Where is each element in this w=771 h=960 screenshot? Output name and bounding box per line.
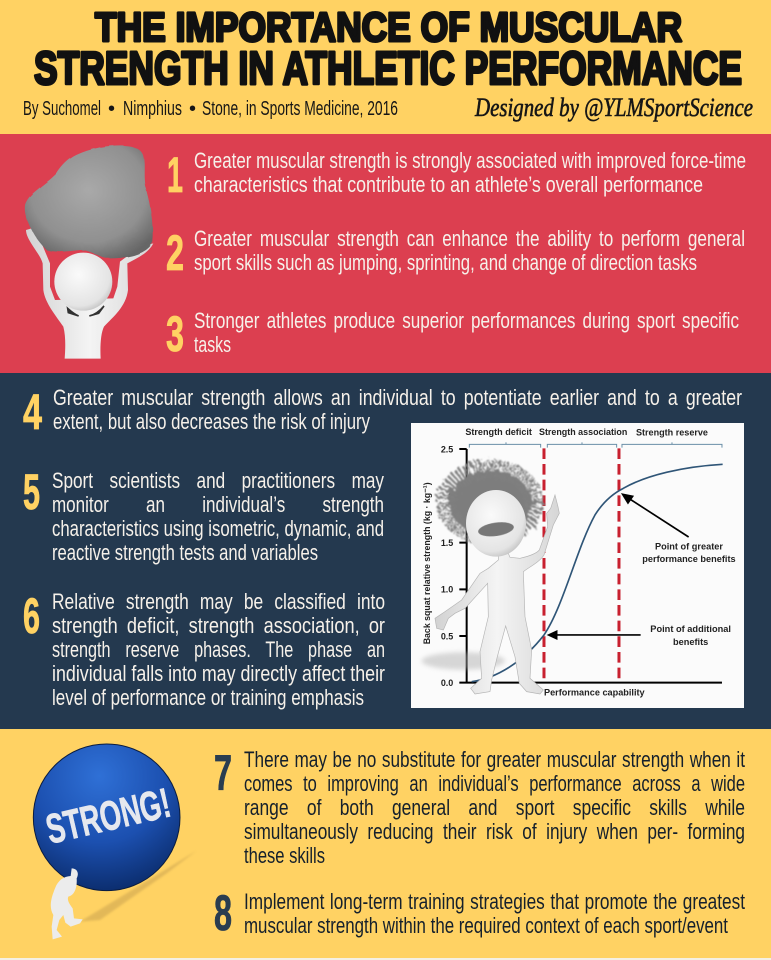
- axis ticks labels: 2: [448, 491, 453, 501]
- number 2: 2: [166, 225, 184, 281]
- text 6: level of performance or training emphasis: [52, 685, 364, 710]
- axis ticks labels: 2.5: [441, 445, 453, 455]
- panel: yellow section: [0, 729, 771, 960]
- text 6: [52, 589, 385, 710]
- number 7: 7: [214, 745, 232, 801]
- point 8: [214, 885, 745, 941]
- chart: strength phases curve: [411, 423, 744, 708]
- icon: figure lifting rock: [25, 145, 153, 359]
- panel: navy section: [0, 373, 771, 729]
- panel: header: [0, 0, 771, 134]
- phase labels: Strength deficit: [465, 427, 532, 437]
- arrow to upper point: [623, 494, 689, 537]
- text 4: [53, 385, 742, 434]
- text 1: [194, 148, 746, 197]
- axis ticks labels: [441, 445, 453, 688]
- number 6: 6: [23, 588, 40, 644]
- text 5: characteristics using isometric, dynamic, and: [52, 516, 384, 541]
- text 5: [52, 468, 384, 565]
- title: THE IMPORTANCE OF MUSCULAR: [95, 4, 682, 50]
- byline: By Suchomel: [23, 98, 101, 120]
- text 5: Sport scientists and practitioners may: [52, 468, 384, 493]
- text 6: strength deficit, strength association, or: [52, 613, 385, 638]
- title: [34, 4, 742, 94]
- phase labels: Strength reserve: [636, 428, 708, 438]
- text 3: [194, 308, 739, 357]
- point 7: [214, 745, 745, 868]
- phase labels: Strength association: [539, 427, 628, 437]
- number 1: 1: [167, 147, 183, 203]
- axis ticks labels: 0.0: [441, 678, 453, 688]
- text 5: monitor an individual’s strength: [52, 492, 384, 517]
- text 6: individual falls into may directly affect their: [52, 661, 385, 686]
- point 2: [166, 225, 745, 281]
- number 5: 5: [23, 464, 40, 520]
- x axis label: Performance capability: [544, 688, 645, 698]
- phase brackets: [469, 442, 722, 448]
- annotation lower: benefits: [673, 637, 708, 647]
- point 3: [166, 306, 739, 362]
- text 2: [194, 226, 745, 275]
- byline: [23, 98, 398, 120]
- annotation lower: [650, 624, 731, 647]
- phase labels: [465, 427, 708, 438]
- text 4: extent, but also decreases the risk of injury: [53, 409, 370, 434]
- point 4: [23, 384, 742, 440]
- panel: red section: [0, 134, 771, 373]
- text 5: reactive strength tests and variables: [52, 540, 318, 565]
- point 5: [23, 464, 384, 565]
- point 6: [23, 588, 385, 710]
- s-curve: [472, 464, 723, 682]
- byline: Nimphius: [123, 98, 182, 120]
- text 7: these skills: [244, 843, 325, 868]
- point 1: [167, 147, 746, 203]
- arrow to lower point: [549, 631, 641, 639]
- axis ticks labels: 0.5: [441, 631, 453, 641]
- annotation lower: Point of additional: [650, 624, 731, 634]
- number 4: 4: [23, 384, 42, 440]
- annotation upper: [642, 542, 736, 564]
- axes: [459, 449, 722, 683]
- threshold lines: [544, 448, 619, 683]
- text 8: [244, 889, 745, 938]
- y axis label: Back squat relative strength (kg · kg⁻¹): [422, 482, 432, 644]
- icon: professor figure: [422, 469, 559, 694]
- text 6: strength reserve phases. The phase an: [52, 637, 385, 662]
- icon: figure pushing ball uphill: STRONG!: [41, 779, 175, 853]
- byline: •: [189, 98, 196, 120]
- icon: figure pushing ball uphill: [33, 744, 197, 939]
- axis ticks labels: 1.0: [441, 585, 453, 595]
- byline: •: [108, 98, 115, 120]
- text 7: [244, 747, 745, 868]
- axis ticks labels: 1.5: [441, 538, 453, 548]
- number 3: 3: [166, 306, 184, 362]
- byline: Stone, in Sports Medicine, 2016: [202, 98, 398, 120]
- text 6: Relative strength may be classified into: [52, 589, 385, 614]
- annotation upper: performance benefits: [642, 554, 736, 564]
- number 8: 8: [214, 885, 232, 941]
- annotation upper: Point of greater: [655, 542, 723, 552]
- text 3: tasks: [194, 332, 231, 357]
